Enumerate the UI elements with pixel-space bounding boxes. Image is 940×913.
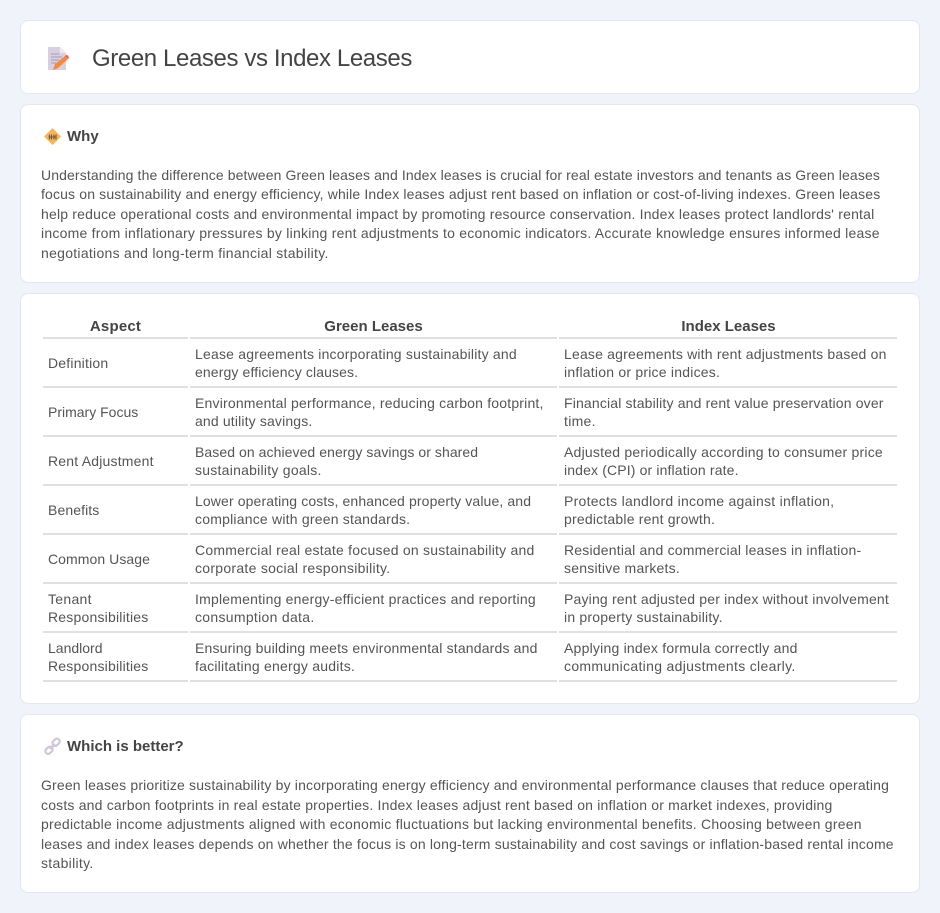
heading: page title: Green Leases vs Index Leases <box>92 45 412 72</box>
row: primary focus: time. <box>564 413 596 429</box>
heading: why: Why <box>67 128 99 145</box>
text: which is better paragraph: predictable income adjustments aligned with economic fluctuations but lacking environmental benefits. Choosing between green <box>41 816 862 832</box>
table header: Aspect <box>90 318 141 335</box>
row: tenant responsibilities: Paying rent adjusted per index without involvement <box>564 591 889 607</box>
row: definition <box>48 346 887 380</box>
text: why paragraph: income from inflationary pressures by linking rent adjustments to economic indicators. Accurate knowledge ensures informed lease <box>41 225 880 241</box>
row: rent adjustment: sustainability goals. <box>195 462 322 478</box>
text: why paragraph: focus on sustainability and energy efficiency, while Index leases adjust rent based on inflation or cost-of-living indexes. Green leases <box>41 186 880 202</box>
row: primary focus: and utility savings. <box>195 413 312 429</box>
table header <box>90 318 776 335</box>
row: common usage: corporate social responsibility. <box>195 560 390 576</box>
icon: chain link <box>44 738 61 755</box>
row: definition: Lease agreements with rent adjustments based on <box>564 346 887 362</box>
text: why paragraph: help reduce operational costs and environmental impact by promoting resource conservation. Index leases protect landlords' rental <box>41 206 874 222</box>
panel: title <box>20 20 920 94</box>
text: which is better paragraph <box>41 777 894 871</box>
row: common usage: Common Usage <box>48 551 150 567</box>
row: rent adjustment: Based on achieved energy savings or shared <box>195 444 478 460</box>
heading: which is better: Which is better? <box>67 738 184 755</box>
row: rent adjustment: index (CPI) or inflation rate. <box>564 462 739 478</box>
row: common usage <box>48 542 861 576</box>
row: tenant responsibilities: Implementing energy-efficient practices and reporting <box>195 591 536 607</box>
text: why paragraph <box>41 167 880 261</box>
panel: why <box>20 104 920 283</box>
text: which is better paragraph: Green leases prioritize sustainability by incorporating energy efficiency and environmental performance clauses that reduce operating <box>41 777 889 793</box>
row: benefits: Protects landlord income against inflation, <box>564 493 834 509</box>
table header: Index Leases <box>681 318 776 335</box>
row: common usage: Commercial real estate focused on sustainability and <box>195 542 535 558</box>
row: landlord responsibilities: Applying index formula correctly and <box>564 640 798 656</box>
row: definition: Lease agreements incorporating sustainability and <box>195 346 517 362</box>
panel: comparison table <box>20 293 920 704</box>
row: landlord responsibilities: communicating adjustments clearly. <box>564 658 796 674</box>
row: primary focus <box>48 395 884 429</box>
row: landlord responsibilities: Ensuring building meets environmental standards and <box>195 640 538 656</box>
row: definition: energy efficiency clauses. <box>195 364 358 380</box>
row: benefits: Lower operating costs, enhanced property value, and <box>195 493 531 509</box>
row: tenant responsibilities: Responsibilities <box>48 609 148 625</box>
row: definition: Definition <box>48 355 108 371</box>
row: benefits: predictable rent growth. <box>564 511 715 527</box>
row: tenant responsibilities <box>48 591 889 625</box>
row: rent adjustment: Rent Adjustment <box>48 453 154 469</box>
row: landlord responsibilities: facilitating energy audits. <box>195 658 355 674</box>
row: landlord responsibilities: Responsibilities <box>48 658 148 674</box>
row: landlord responsibilities: Landlord <box>48 640 102 656</box>
row: rent adjustment: Adjusted periodically according to consumer price <box>564 444 883 460</box>
table header: Green Leases <box>324 318 423 335</box>
icon: document with pencil <box>48 47 69 70</box>
row: rent adjustment <box>48 444 883 478</box>
row: landlord responsibilities <box>48 640 798 674</box>
text: which is better paragraph: stability. <box>41 855 94 871</box>
text: why paragraph: negotiations and long-term financial stability. <box>41 245 329 261</box>
row: benefits: Benefits <box>48 502 99 518</box>
row: tenant responsibilities: consumption data. <box>195 609 315 625</box>
row: primary focus: Environmental performance, reducing carbon footprint, <box>195 395 544 411</box>
text: why paragraph: Understanding the difference between Green leases and Index leases is crucial for real estate investors and tenants as Green leases <box>41 167 880 183</box>
row: tenant responsibilities: in property sustainability. <box>564 609 723 625</box>
text: which is better paragraph: leases and index leases depends on whether the focus is on long-term sustainability and cost savings or inflation-based rental income <box>41 836 894 852</box>
row: common usage: sensitive markets. <box>564 560 680 576</box>
row: common usage: Residential and commercial leases in inflation- <box>564 542 861 558</box>
text: which is better paragraph: costs and carbon footprints in real estate properties. Index leases adjust rent based on inflation or market indexes, providing <box>41 797 832 813</box>
row: tenant responsibilities: Tenant <box>48 591 92 607</box>
row: benefits: compliance with green standards. <box>195 511 410 527</box>
icon: warning diamond <box>44 128 61 145</box>
row: definition: inflation or price indices. <box>564 364 720 380</box>
row: benefits <box>48 493 834 527</box>
row: primary focus: Financial stability and rent value preservation over <box>564 395 884 411</box>
panel: which is better <box>20 714 920 893</box>
row: primary focus: Primary Focus <box>48 404 138 420</box>
